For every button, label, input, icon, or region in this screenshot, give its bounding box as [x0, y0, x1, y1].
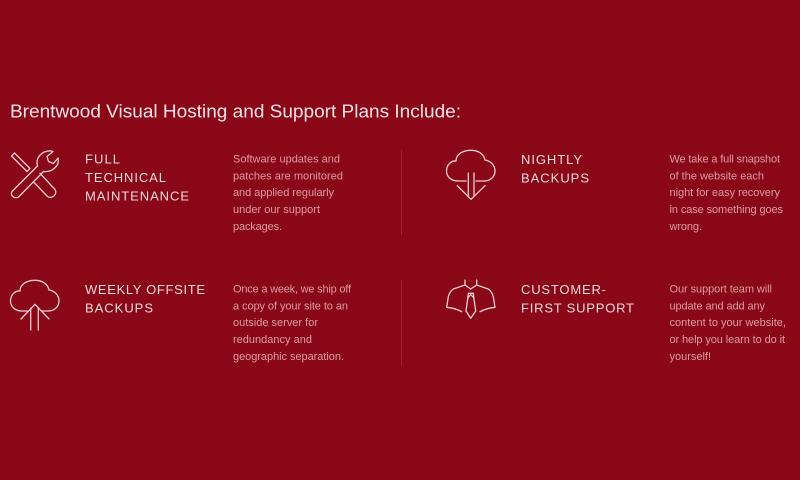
heading: weekly offsite backups: BACKUPS [85, 301, 153, 316]
icon: wrench and screwdriver [11, 151, 58, 198]
heading: full technical maintenance [85, 152, 189, 204]
description: customer support: update and add any [670, 300, 766, 312]
description: nightly [668, 154, 784, 233]
heading: nightly backups: BACKUPS [521, 170, 589, 185]
description: weekly: a copy of your site to an [233, 300, 348, 312]
description: nightly: We take a full snapshot [670, 154, 780, 166]
heading: customer-first support: CUSTOMER- [521, 282, 606, 297]
heading: customer-first support [521, 282, 634, 316]
panel: nightly backups [446, 150, 784, 233]
description: maintenance: patches are monitored [233, 170, 343, 182]
heading: weekly offsite backups: WEEKLY OFFSITE [85, 282, 205, 297]
description: nightly: wrong. [668, 221, 702, 233]
description: weekly: outside server for [233, 317, 318, 329]
description: customer support: yourself! [670, 351, 711, 363]
description: weekly [233, 284, 352, 363]
description: nightly: in case something goes [670, 204, 784, 216]
heading: weekly offsite backups [85, 282, 205, 316]
description: weekly: Once a week, we ship off [233, 284, 352, 296]
panel: weekly offsite backups [10, 280, 352, 363]
description: nightly: of the website each [670, 170, 764, 182]
description: customer support: Our support team will [670, 284, 772, 296]
heading: nightly backups: NIGHTLY [521, 152, 582, 167]
description: weekly: geographic separation. [233, 351, 344, 363]
icon: cloud download [446, 150, 495, 199]
heading: customer-first support: FIRST SUPPORT [521, 301, 634, 316]
description: maintenance: and applied regularly [233, 187, 334, 199]
description: customer support [670, 284, 786, 363]
title: Brentwood Visual Hosting and Support Plans Include: [10, 100, 461, 122]
description: maintenance: packages. [233, 221, 282, 233]
heading: full technical maintenance: TECHNICAL [85, 170, 166, 185]
description: nightly: night for easy recovery [670, 187, 780, 199]
description: customer support: content to your website, [670, 317, 786, 329]
description: maintenance: under our support [233, 204, 320, 216]
description: maintenance [233, 154, 343, 233]
panel: full technical maintenance [11, 151, 343, 233]
description: customer support: or help you learn to do it [670, 334, 785, 346]
description: weekly: redundancy and [233, 334, 312, 346]
heading: full technical maintenance: FULL [85, 152, 120, 166]
heading: nightly backups [521, 152, 589, 185]
panel: customer-first support [447, 280, 786, 363]
icon: cloud upload [10, 280, 59, 330]
description: maintenance: Software updates and [233, 154, 340, 166]
heading: full technical maintenance: MAINTENANCE [85, 188, 189, 204]
icon: shirt and tie [447, 280, 495, 318]
